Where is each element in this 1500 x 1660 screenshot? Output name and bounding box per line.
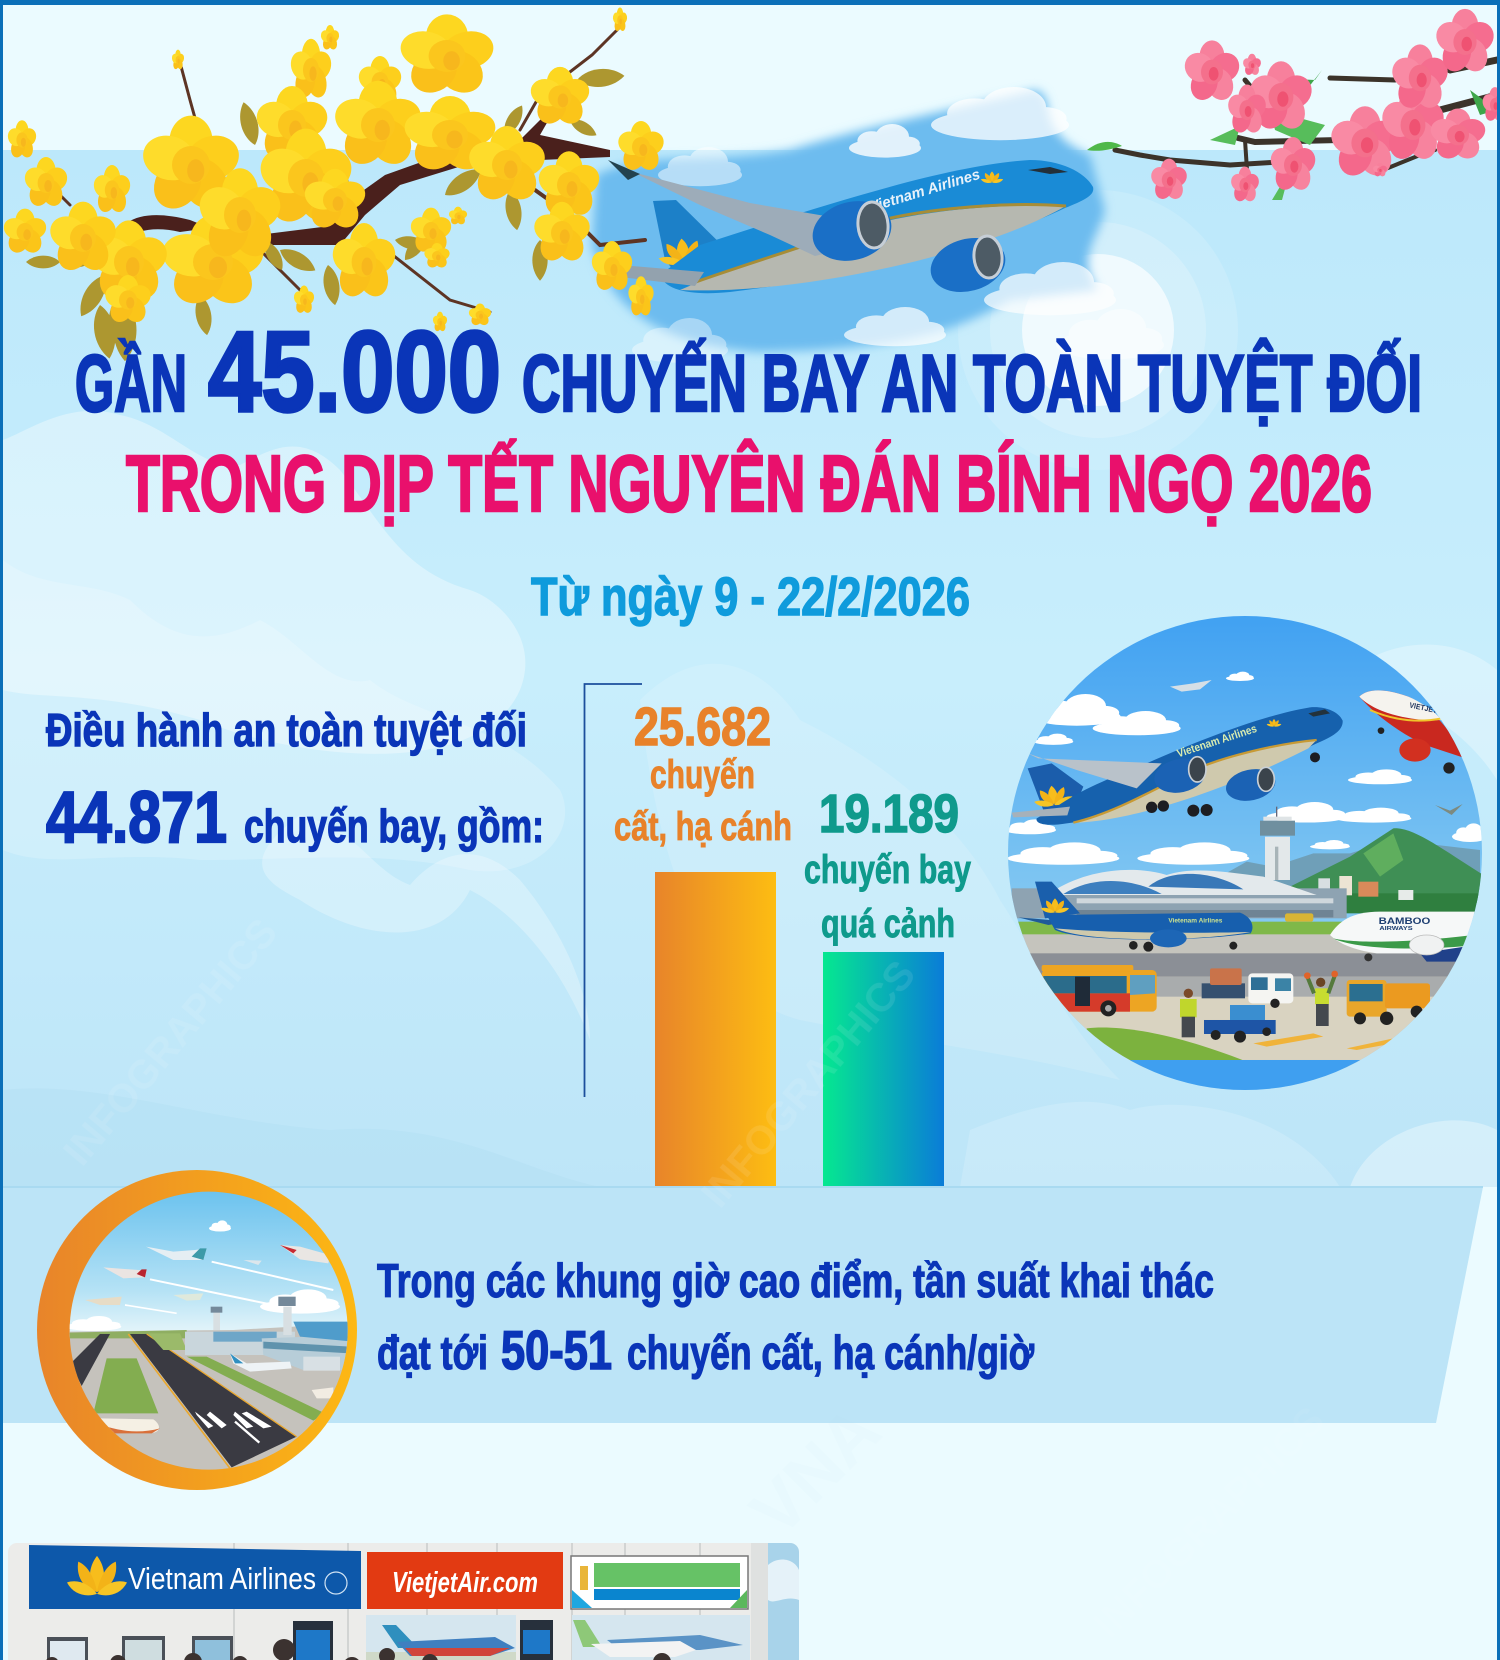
sign: Vietnam Airlines: Vietnam Airlines [128, 1561, 316, 1596]
bar: transit flights [804, 784, 972, 1188]
summary text: chuyến bay, gồm: [244, 800, 544, 852]
bar: transit flights: 19.189 [819, 784, 959, 844]
watermarks: VNA [735, 1391, 895, 1551]
parked plane: Bamboo Airways: BAMBOO [1379, 916, 1430, 926]
icon: runway illustration circle [37, 1170, 357, 1490]
terminal [185, 1297, 353, 1398]
parked plane: Vietnam Airlines [1018, 882, 1252, 952]
sign: Vietjet: VietjetAir.com [392, 1567, 538, 1599]
icon: airport illustration circle [1008, 616, 1482, 1090]
bar: landing and takeoff: chuyến [650, 753, 755, 797]
runways [71, 1333, 325, 1468]
bar chart [614, 697, 972, 1188]
peak hour text: đạt tới [377, 1326, 488, 1379]
control tower [1260, 807, 1295, 880]
summary text: 44.871 [46, 778, 227, 858]
parked plane: Bamboo Airways: AIRWAYS [1379, 926, 1413, 932]
peak hour text: chuyến cất, hạ cánh/giờ [627, 1326, 1034, 1379]
icon: pink peach blossom branch [1087, 9, 1500, 205]
title line 1: 45.000 [208, 309, 501, 436]
watermarks: INFOGRAPHICS [55, 911, 286, 1174]
sun disc behind plane [958, 190, 1238, 470]
sign: Vietjet [367, 1552, 563, 1609]
bar: landing and takeoff: 25.682 [634, 697, 771, 757]
panel: peak hour callout [3, 1187, 1483, 1423]
peak hour text: 50-51 [501, 1319, 612, 1381]
bracket divider [584, 684, 642, 1097]
terminal building [1012, 870, 1347, 918]
bus [1042, 965, 1157, 1016]
title line 1 [75, 309, 1422, 436]
watermarks: INFOGRAPHICS [693, 953, 924, 1216]
small plane [1170, 680, 1212, 692]
sign: Bamboo [571, 1556, 748, 1609]
taking-off plane: Vietnam Airlines [1012, 707, 1343, 825]
icon: Vietnam Airlines plane [596, 160, 1093, 300]
taking-off plane: Vietnam Airlines: Vietenam Airlines [1176, 723, 1259, 760]
icon: yellow apricot blossom branch [1, 8, 666, 361]
bird [1435, 804, 1463, 815]
taking-off plane: Vietjet [1359, 690, 1463, 774]
summary text [46, 704, 544, 858]
apron [1022, 934, 1468, 1068]
bar: landing and takeoff: cất, hạ cánh [614, 805, 792, 849]
watermarks [55, 911, 1333, 1646]
sign: Vietnam Airlines [29, 1545, 361, 1609]
sky panel with cloud pattern [3, 150, 1497, 1187]
bar: transit flights: chuyến bay [804, 848, 972, 892]
parked plane: Vietnam Airlines: Vietenam Airlines [1168, 918, 1223, 925]
date subtitle: Từ ngày 9 - 22/2/2026 [531, 567, 970, 627]
watermarks: INFOGRAPHICS [1085, 1398, 1333, 1646]
parked plane: Bamboo Airways [1330, 912, 1487, 962]
bar: transit flights: quá cảnh [821, 902, 955, 946]
taking-off plane: Vietjet: VIETJET [1409, 700, 1438, 715]
sky patch with clouds behind plane [592, 87, 1164, 363]
mountains [1220, 828, 1487, 913]
ground vehicles and workers [1180, 968, 1430, 1043]
check-in kiosks [47, 1620, 553, 1660]
peak hour text: Trong các khung giờ cao điểm, tần suất khai thác [377, 1254, 1214, 1307]
photo: airline check-in counters [8, 1543, 799, 1660]
peak hour text [377, 1254, 1214, 1381]
parked plane [100, 1418, 159, 1433]
summary text: Điều hành an toàn tuyệt đối [46, 704, 527, 756]
title line 1: GẦN [75, 338, 187, 429]
windows with parked planes [366, 1615, 750, 1660]
passengers [45, 1639, 671, 1660]
icon: Vietnam Airlines plane: Vietnam Airlines [867, 166, 982, 216]
flying planes [85, 1245, 333, 1313]
bar: landing and takeoff [614, 697, 792, 1188]
